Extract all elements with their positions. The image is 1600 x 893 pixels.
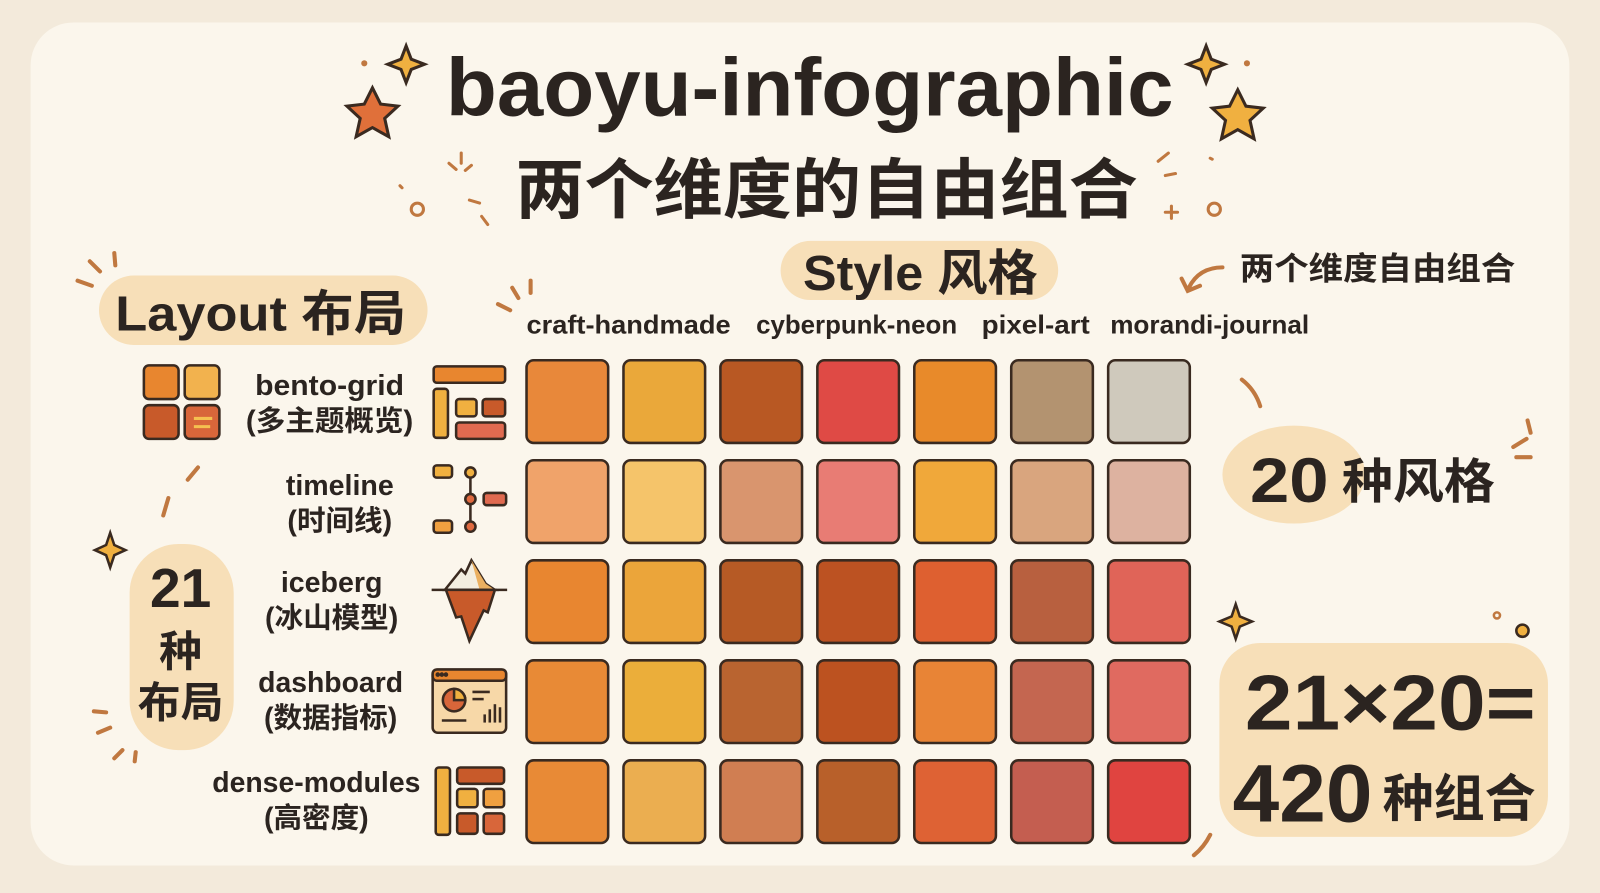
heading pill: Layout: Layout 布局 bbox=[115, 288, 406, 342]
icon: bento-grid bbox=[434, 366, 505, 439]
row labels: (冰山模型) bbox=[265, 603, 398, 635]
swatch grid bbox=[527, 360, 1190, 843]
callout: total combinations bbox=[1194, 604, 1548, 855]
column labels bbox=[527, 312, 1309, 340]
callout: total combinations: 420 bbox=[1233, 749, 1372, 840]
row labels: (时间线) bbox=[287, 506, 392, 538]
note: two dimensions with arrow bbox=[1182, 251, 1515, 291]
callout: 20 styles bbox=[1222, 380, 1531, 524]
row labels: (高密度) bbox=[264, 803, 369, 835]
row labels: (数据指标) bbox=[264, 703, 397, 735]
column labels: craft-handmade bbox=[527, 312, 731, 340]
callout: 21 layouts bbox=[94, 467, 234, 761]
icon: small bento (left) bbox=[144, 365, 219, 439]
row labels: dashboard bbox=[258, 667, 403, 699]
callout: 20 styles: 20 bbox=[1250, 446, 1329, 516]
row labels: timeline bbox=[286, 470, 394, 502]
icon: iceberg bbox=[432, 560, 507, 641]
icon: dense-modules bbox=[436, 767, 504, 835]
callout: total combinations: 21×20= bbox=[1245, 661, 1536, 747]
row labels: bento-grid bbox=[255, 370, 404, 402]
callout: 20 styles: 种风格 bbox=[1342, 456, 1495, 509]
title: baoyu-infographic bbox=[446, 42, 1173, 133]
row labels: (多主题概览) bbox=[246, 406, 413, 438]
subtitle: 两个维度的自由组合 bbox=[515, 153, 1138, 226]
column labels: morandi-journal bbox=[1110, 312, 1309, 340]
callout: 21 layouts: 种 bbox=[159, 628, 202, 676]
row labels: iceberg bbox=[281, 567, 382, 599]
icon: dashboard bbox=[433, 669, 506, 733]
heading pill: Style: Style 风格 bbox=[803, 247, 1038, 301]
row labels bbox=[212, 370, 420, 835]
note: two dimensions with arrow: 两个维度自由组合 bbox=[1240, 251, 1515, 287]
heading pill: Layout bbox=[78, 253, 531, 345]
callout: 21 layouts: 布局 bbox=[138, 679, 223, 727]
row labels: dense-modules bbox=[212, 767, 420, 799]
callout: total combinations: 种组合 bbox=[1383, 770, 1536, 827]
decorations: title stars bbox=[347, 46, 1263, 225]
column labels: pixel-art bbox=[982, 312, 1090, 340]
icon: timeline bbox=[434, 465, 506, 533]
callout: 21 layouts: 21 bbox=[150, 557, 211, 619]
column labels: cyberpunk-neon bbox=[756, 312, 957, 340]
